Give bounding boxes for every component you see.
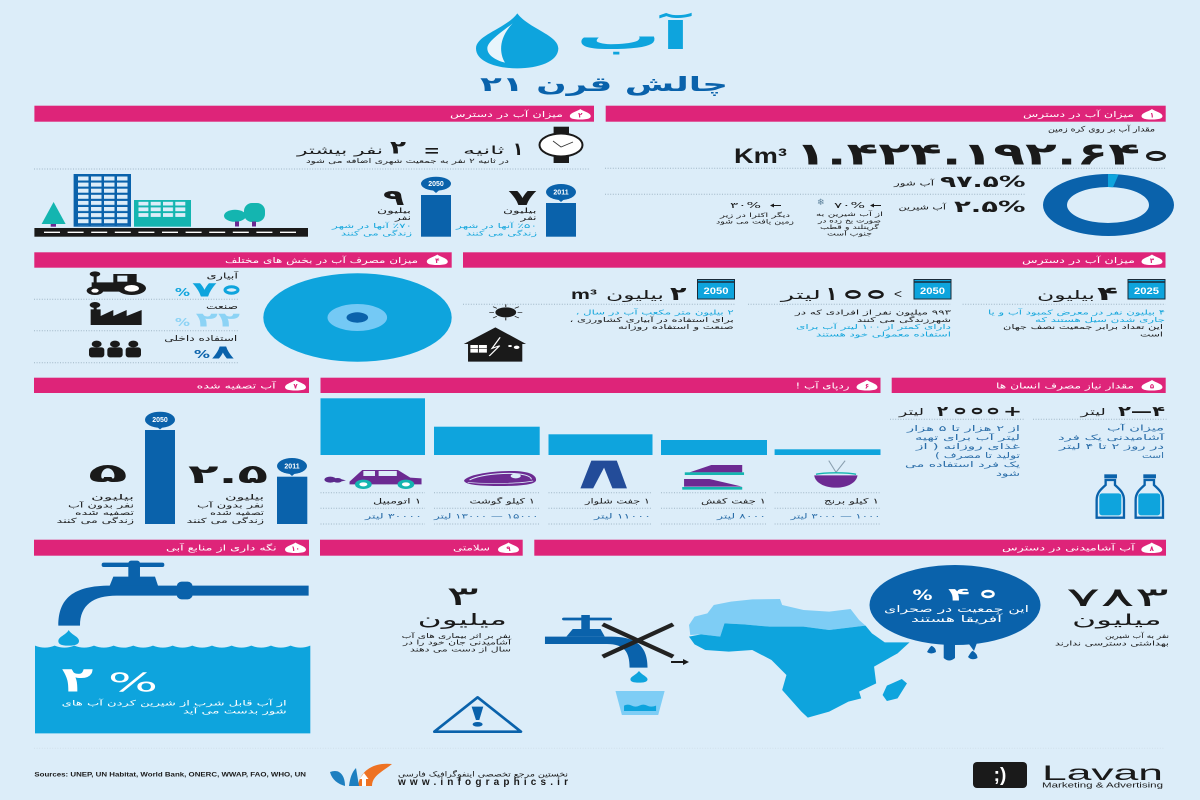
stat: fresh water: ۲.۵% xyxy=(954,197,1026,216)
row: industry: % xyxy=(175,316,190,329)
column: under 100 litres 2050: < xyxy=(894,287,902,301)
column: under 100 litres 2050: ۱ xyxy=(826,283,837,305)
column: drinking litres: ۲—۴ xyxy=(1118,404,1166,420)
bar: 2011 without treated water: 2011 xyxy=(284,464,300,470)
row: litre values: ۱۵۰۰۰ — ۱۳۰۰۰ لیتر xyxy=(432,512,539,520)
header 10: ۱۰ xyxy=(291,545,300,553)
bar: 2050 without treated water: تصفیه شده xyxy=(75,509,134,517)
icon: crossed tap with cup xyxy=(545,615,689,715)
bar: 2011 without treated water: زندگی می کنند xyxy=(187,516,264,525)
subtitle: چالش قرن ۲۱ xyxy=(480,72,728,97)
icon: shoes xyxy=(682,465,744,490)
column: food litres: یک فرد استفاده می xyxy=(905,460,1020,469)
stat: 3 million: آشامیدنی جان خود را در xyxy=(401,638,513,647)
column: food litres: تولید تا مصرف ) xyxy=(935,451,1020,460)
icon: water drop logo xyxy=(476,13,558,68)
bar: 2050 without treated water: بیلیون xyxy=(91,492,134,502)
row: domestic use: % xyxy=(194,348,210,361)
footer: infographics logo: نخستین مرجع تخصصی اینفوگرافیک فارسی xyxy=(398,770,568,778)
column: 2 billion m3 2050: بیلیون xyxy=(606,288,664,303)
unit: km3: Km³ xyxy=(734,145,787,168)
column: food litres: ۲ xyxy=(937,404,949,420)
stat: 783 million: ۷۸۳ xyxy=(1066,583,1169,613)
column: groundwater 30 percent: زمین یافت می شود xyxy=(716,219,794,226)
callout: 40 percent in sub-saharan africa: آفریقا هستند xyxy=(911,613,1003,625)
bar: 2050 without treated water xyxy=(57,412,175,525)
column: 2 billion m3 2050: ۲ xyxy=(670,283,687,305)
column: food litres: لیتر xyxy=(897,408,924,418)
bar: 2011 without treated water: بیلیون xyxy=(225,492,264,502)
column: groundwater 30 percent: ۳۰% xyxy=(730,201,762,210)
panel 4: water use by sector xyxy=(34,252,452,363)
bar: 2011 population: زندگی می کنند xyxy=(466,230,537,238)
icon: car xyxy=(324,470,422,489)
bar: 2050 without treated water: نفر بدون آب xyxy=(68,500,134,510)
stat: 3 million: نفر بر اثر بیماری های آب xyxy=(402,631,511,640)
column: under 100 litres 2050: ۹۹۳ میلیون نفر از افرادی که در xyxy=(793,308,952,316)
column: under 100 litres 2050: دارای کمتر از ۱۰۰ لیتر آب برای xyxy=(796,322,951,331)
column: drinking litres xyxy=(1033,404,1167,460)
column: food litres: شود xyxy=(996,469,1020,478)
bar: 2050 population: 2050 xyxy=(428,181,444,188)
column: 4 billion 2025: بیلیون xyxy=(1037,288,1095,303)
equation: one second equals two more people: در ثانیه ۲ نفر به جمعیت شهری اضافه می شود xyxy=(306,157,509,165)
stat: 2 percent xyxy=(62,661,287,716)
row: litre values xyxy=(363,512,881,520)
stat: fresh water xyxy=(898,197,1026,216)
bar: 2011 population: نفر xyxy=(519,214,537,222)
column: 2 billion m3 2050: 2050 xyxy=(704,286,728,296)
header 9: ۹ xyxy=(506,545,511,553)
header 7: ۷ xyxy=(293,382,298,390)
panel 6: water footprint xyxy=(320,378,880,524)
stat: 3 million: ۳ xyxy=(446,582,479,612)
stat: salt water: آب شور xyxy=(892,178,935,188)
column: 4 billion 2025: این تعداد برابر جمعیت نصف جهان xyxy=(1003,323,1163,331)
row: item labels xyxy=(373,496,879,506)
header 10 xyxy=(34,540,309,556)
row: irrigation: ۰ xyxy=(229,287,233,293)
column: under 100 litres 2050: ۰ xyxy=(851,291,855,298)
row: industry: ۲۲ xyxy=(196,308,240,332)
bar: 2011 population xyxy=(454,184,576,238)
column: food litres: ۰ xyxy=(976,408,978,412)
big number: total water xyxy=(795,136,1164,172)
stat: 2 percent: ۲ xyxy=(62,661,93,701)
header 8 xyxy=(534,540,1166,556)
column: 2 billion m3 2050: m³ xyxy=(571,286,597,302)
bar: 2050 population: نفر xyxy=(393,214,411,222)
column: 4 billion 2025: 2025 xyxy=(1134,286,1159,296)
header 9: سلامتی xyxy=(453,544,490,552)
row: litre values: ۱۱۰۰۰ لیتر xyxy=(592,512,651,520)
row: domestic use xyxy=(89,334,237,363)
panel 3: future scarcity xyxy=(463,252,1166,362)
row: litre values: ۳۰۰۰۰ لیتر xyxy=(363,512,422,520)
equation: one second equals two more people: = xyxy=(424,143,439,160)
footer: lavan logo: Marketing & Advertising xyxy=(1042,782,1163,790)
equation: one second equals two more people: ۱ xyxy=(513,139,523,160)
column: drinking litres: در روز ۲ تا ۴ لیتر xyxy=(1057,442,1164,451)
header 6 xyxy=(320,378,880,393)
header 7 xyxy=(34,378,309,393)
header 1: میزان آب در دسترس xyxy=(1023,109,1134,119)
row: item labels: ۱ کیلو گوشت xyxy=(470,496,535,506)
water block xyxy=(35,646,310,733)
stat: 783 million: میلیون xyxy=(1072,611,1162,629)
column: drinking litres: لیتر xyxy=(1079,408,1106,418)
stat: 3 million: میلیون xyxy=(418,610,507,630)
big number: total water: ۱.۴۲۴.۱۹۲.۶۴ xyxy=(795,136,1140,172)
column: food litres: + xyxy=(1003,404,1022,420)
header 3: ۳ xyxy=(1150,257,1155,265)
column: drinking litres: آشامیدنی یک فرد xyxy=(1058,432,1166,442)
icon: falling drop xyxy=(58,630,79,646)
panel 2: urban population xyxy=(34,106,594,238)
footer: infographics logo xyxy=(330,764,568,788)
stat: 2 percent: از آب قابل شرب از شیرین کردن آب های xyxy=(62,698,287,708)
bar: 2011 without treated water: ۲.۵ xyxy=(188,460,268,490)
equation: one second equals two more people: ۲ xyxy=(390,138,406,158)
title: water: آب xyxy=(576,12,692,58)
icon: damaged house xyxy=(464,327,526,362)
column: 4 billion 2025: است xyxy=(1140,330,1163,338)
row: irrigation: ۷ xyxy=(192,278,217,302)
donut chart: salt vs fresh water xyxy=(1043,174,1174,236)
column: 4 billion 2025: جاری شدن سیل هستند که xyxy=(1035,316,1165,324)
header 9 xyxy=(320,540,523,556)
header 1 xyxy=(606,106,1166,122)
bar: 2050 without treated water: زندگی می کنند xyxy=(57,516,134,525)
row: industry: صنعت xyxy=(206,302,238,311)
row: litre values: ۱۰۰۰ — ۳۰۰۰ لیتر xyxy=(789,512,880,520)
panel 7: treated water xyxy=(34,378,309,525)
bar: 2050 population: ۹ xyxy=(383,186,404,211)
bar: 2050 population: ٪۷۰ آنها در شهر xyxy=(330,221,412,230)
stat: salt water: ۹۷.۵% xyxy=(940,172,1026,191)
bar: 2050 population xyxy=(330,177,451,238)
bar: 2011 population: ۷ xyxy=(508,186,538,211)
row: domestic use: استفاده داخلی xyxy=(164,334,237,343)
row: irrigation: آبیاری xyxy=(206,270,239,280)
column: frozen 70 percent: ❄ xyxy=(817,198,825,208)
column: food litres: ۰ xyxy=(959,408,961,412)
bar: 2011 population: ٪۵۰ آنها در شهر xyxy=(454,221,537,230)
header 4 xyxy=(34,252,452,268)
column: food litres: لیتر آب برای تهیه xyxy=(915,432,1020,442)
bar: 2050 population: زندگی می کنند xyxy=(341,230,412,238)
bar: 2050 without treated water: 2050 xyxy=(152,417,168,424)
row: domestic use: ۸ xyxy=(212,341,235,363)
callout: 40 percent in sub-saharan africa: % xyxy=(912,588,932,604)
column: 4 billion 2025: ۴ xyxy=(1097,283,1118,305)
column: groundwater 30 percent: دیگر اکثرا در زیر xyxy=(718,211,791,219)
header 2: میزان آب در دسترس xyxy=(450,109,563,119)
header 4: ۴ xyxy=(435,257,440,265)
row: item labels: ۱ اتومبیل xyxy=(373,496,422,506)
footer: lavan logo: Lavan xyxy=(1042,762,1163,785)
icon: sun xyxy=(489,304,522,320)
header 2 xyxy=(34,106,594,122)
header 5: ۵ xyxy=(1150,382,1155,390)
header 8: ۸ xyxy=(1150,545,1155,553)
column: groundwater 30 percent xyxy=(716,201,794,226)
stat: 783 million xyxy=(1055,583,1169,647)
column: 4 billion 2025: ۴ بیلیون نفر در معرض کمبود آب و یا xyxy=(988,308,1166,316)
title block xyxy=(476,12,728,97)
header 3 xyxy=(463,252,1166,268)
column: food litres: غذای روزانه ( از xyxy=(914,442,1020,451)
stat: fresh water: آب شیرین xyxy=(898,202,947,212)
icon: warning triangle xyxy=(434,697,521,732)
column: drinking litres: میزان آب xyxy=(1107,422,1164,432)
column: frozen 70 percent: ۷۰% xyxy=(834,201,866,210)
column: food litres: ۰ xyxy=(992,408,994,412)
column: 2 billion m3 2050 xyxy=(463,280,736,331)
icon: rice bowl xyxy=(814,461,857,488)
stat: 783 million: بهداشتی دسترسی ندارند xyxy=(1055,639,1169,647)
icon: two water bottles xyxy=(1097,474,1163,518)
chart: nested circles xyxy=(263,273,452,362)
equation: one second equals two more people: نفر بیشتر xyxy=(295,144,383,157)
stat: 3 million: سال از دست می دهند xyxy=(410,645,511,653)
row: item labels: ۱ کیلو برنج xyxy=(824,496,879,506)
column: under 100 litres 2050: شهرزندگی می کنند xyxy=(857,316,951,324)
map: africa xyxy=(689,599,910,718)
column: frozen 70 percent xyxy=(816,198,884,238)
label: amount of water on earth: مقدار آب بر روی کره زمین xyxy=(1048,124,1155,134)
column: food litres xyxy=(890,404,1024,478)
column: under 100 litres 2050 xyxy=(748,280,952,338)
footer: infographics logo: www.infographics.ir xyxy=(397,777,568,788)
header 4: میزان مصرف آب در بخش های مختلف xyxy=(225,255,418,265)
column: frozen 70 percent: صورت یخ زده در xyxy=(817,218,881,225)
bar: 2050 without treated water: ۵ xyxy=(88,459,128,489)
big number: total water: ۰ xyxy=(1154,153,1158,160)
callout: 40 percent in sub-saharan africa: ۰ xyxy=(986,591,990,597)
panel 5: human water need xyxy=(890,378,1167,518)
bar: 2011 without treated water: تصفیه شده xyxy=(210,509,264,517)
equation: one second equals two more people xyxy=(295,138,523,165)
bar chart: water footprint xyxy=(320,398,880,455)
column: 4 billion 2025 xyxy=(963,280,1166,338)
stat: 3 million xyxy=(401,582,513,653)
bar: 2011 without treated water: نفر بدون آب xyxy=(197,500,264,510)
column: under 100 litres 2050: ۰ xyxy=(874,291,878,298)
illustration: city street xyxy=(34,174,308,237)
stat: 2 percent: شور بدست می آید xyxy=(183,706,287,716)
panel 8: drinking water access xyxy=(534,540,1169,718)
column: under 100 litres 2050: استفاده معمولی خود هستند xyxy=(816,330,951,338)
header 10: نگه داری از منابع آبی xyxy=(166,542,277,552)
row: item labels: ۱ جفت کفش xyxy=(701,496,766,506)
row: litre values: ۸۰۰۰ لیتر xyxy=(715,512,766,520)
header 6: ردپای آب ! xyxy=(796,380,850,390)
callout: 40 percent in sub-saharan africa: این جمعیت در صحرای xyxy=(884,605,1029,615)
footer: lavan logo: ;) xyxy=(994,765,1006,786)
bar: 2011 population: 2011 xyxy=(553,190,569,196)
column: frozen 70 percent: جنوب است xyxy=(827,230,872,238)
panel 9: health xyxy=(320,540,523,732)
header 8: آب آشامیدنی در دسترس xyxy=(1002,542,1136,552)
header 2: ۲ xyxy=(578,112,583,120)
row: item labels: ۱ جفت شلوار xyxy=(583,496,650,506)
illustration: tap xyxy=(58,561,309,626)
icon: steak xyxy=(464,471,536,486)
header 1: ۱ xyxy=(1150,112,1154,120)
footer: sources: Sources: UNEP, UN Habitat, World Bank, ONERC, WWAP, FAO, WHO, UN xyxy=(34,772,306,778)
header 7: آب تصفیه شده xyxy=(197,380,277,390)
column: frozen 70 percent: گرینلند و قطب xyxy=(820,223,879,231)
bar: 2011 population: بیلیون xyxy=(503,207,537,215)
icon: jeans xyxy=(580,461,627,488)
icon: watch xyxy=(540,127,582,163)
panel 10: water conservation xyxy=(34,540,310,733)
column: food litres: از ۲ هزار تا ۵ هزار xyxy=(905,424,1020,433)
bar: 2011 without treated water xyxy=(187,458,307,525)
bar: 2050 population: بیلیون xyxy=(377,207,411,215)
column: 2 billion m3 2050: برای استفاده در آبیاری کشاورزی ، xyxy=(570,315,734,324)
header 5: مقدار نیاز مصرف انسان ها xyxy=(996,382,1134,390)
column: drinking litres: است xyxy=(1142,451,1164,460)
column: 2 billion m3 2050: ۲ بیلیون متر مکعب آب در سال ، xyxy=(576,308,735,316)
equation: one second equals two more people: ثانیه xyxy=(463,144,504,157)
column: 2 billion m3 2050: صنعت و استفاده روزانه xyxy=(618,323,734,331)
stat: salt water xyxy=(892,172,1026,191)
panel 1: available water xyxy=(605,106,1174,238)
column: frozen 70 percent: از آب شیرین به xyxy=(816,209,884,218)
header 5 xyxy=(892,378,1166,393)
header 6: ۶ xyxy=(865,382,869,390)
stat: 2 percent: % xyxy=(108,669,158,699)
column: under 100 litres 2050: لیتر xyxy=(779,288,821,303)
row: industry xyxy=(90,302,240,332)
callout: 40 percent in sub-saharan africa: ۴ xyxy=(948,584,970,606)
header 3: میزان آب در دسترس xyxy=(1022,255,1135,265)
stat: 783 million: نفر به آب شیرین xyxy=(1105,631,1169,640)
column: under 100 litres 2050: 2050 xyxy=(920,286,945,296)
callout: 40 percent in sub-saharan africa xyxy=(870,565,1040,660)
row: irrigation xyxy=(87,270,239,302)
row: irrigation: % xyxy=(175,286,190,299)
footer: lavan logo xyxy=(973,762,1163,790)
